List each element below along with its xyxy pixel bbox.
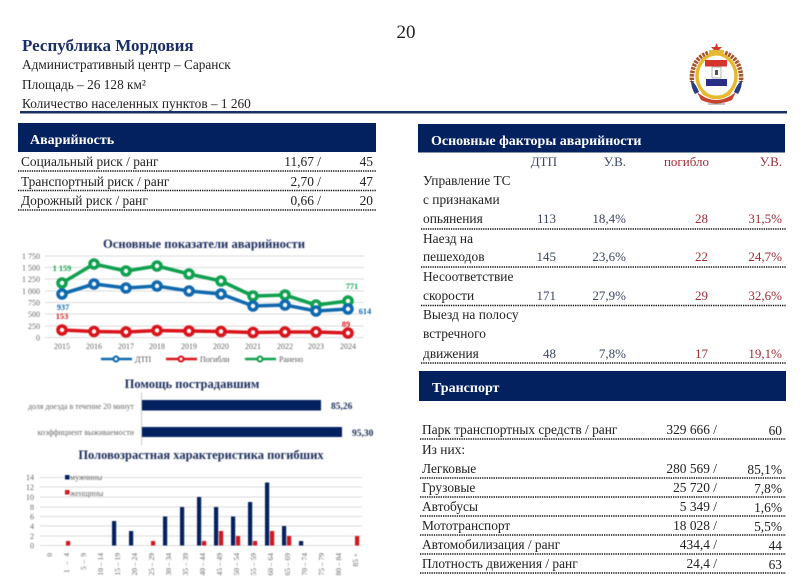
line chart: main accident indicators — [22, 237, 371, 364]
page number: 20 — [396, 22, 416, 43]
age axis labels: 70 – 74 — [300, 553, 309, 576]
region header: Площадь – 26 128 км² — [22, 77, 146, 92]
panel: main accident factors: 24,7% — [748, 249, 782, 264]
panel: main accident factors: 18,4% — [592, 211, 626, 226]
line chart: main accident indicators: 2015 — [54, 342, 70, 351]
panel: transport: 329 666 / — [666, 422, 717, 437]
heading: transport — [419, 371, 786, 401]
panel: transport: Легковые — [422, 461, 476, 476]
line chart: main accident indicators: 1 250 — [22, 275, 40, 284]
panel: transport: 7,8% — [754, 481, 782, 496]
bar chart: aid to victims — [28, 377, 374, 445]
series: deaths — [58, 326, 352, 337]
age axis labels — [45, 553, 360, 576]
line chart: main accident indicators: 153 — [56, 312, 68, 321]
panel: accident rate — [18, 123, 376, 210]
region header: Административный центр – Саранск — [22, 57, 231, 72]
line chart: main accident indicators: 2024 — [340, 342, 356, 351]
panel: transport: Из них: — [422, 442, 465, 457]
age axis labels: 75 – 79 — [317, 553, 326, 576]
panel: main accident factors: У.В. — [760, 154, 782, 169]
panel: accident rate: Социальный риск / ранг — [21, 154, 159, 169]
panel: transport: Автомобилизация / ранг — [422, 537, 561, 552]
panel: transport — [419, 371, 786, 573]
line chart: main accident indicators: 2019 — [181, 342, 197, 351]
panel: main accident factors: погибло — [664, 154, 709, 169]
panel: main accident factors: 17 — [695, 346, 708, 361]
panel: transport: 5 349 / — [680, 499, 717, 514]
bar chart: deaths by sex and age: 0 — [30, 542, 34, 550]
age axis labels: 40 – 44 — [198, 553, 207, 576]
bar chart: deaths by sex and age: 6 — [30, 512, 34, 522]
panel: accident rate: 20 — [360, 193, 373, 208]
panel: main accident factors: 27,9% — [592, 288, 626, 303]
icon: coat of arms — [691, 43, 742, 104]
panel: main accident factors: скорости — [423, 288, 474, 303]
age axis labels: 85 + — [351, 553, 360, 567]
panel: main accident factors: 48 — [543, 346, 556, 361]
bar chart: deaths by sex and age: 2 — [30, 532, 34, 541]
line chart: main accident indicators: 2023 — [308, 342, 324, 351]
panel: main accident factors: 145 — [536, 249, 556, 264]
line chart: main accident indicators: 1 159 — [53, 264, 71, 273]
panel: main accident factors: 29 — [695, 288, 708, 303]
panel: main accident factors: Управление ТС — [423, 173, 511, 188]
chart legend: Ранено — [279, 355, 303, 364]
panel: main accident factors: 171 — [536, 288, 556, 303]
panel: accident rate: 0,66 / — [290, 193, 321, 208]
panel: transport: 44 — [769, 538, 782, 553]
line chart: main accident indicators: 1 750 — [22, 252, 40, 261]
panel: main accident factors: 31,5% — [748, 211, 782, 226]
chart legend — [101, 355, 303, 364]
heading: accident rate — [18, 123, 376, 152]
series: road accidents — [58, 280, 352, 315]
line chart: main accident indicators: 250 — [28, 322, 40, 331]
panel: main accident factors: 32,6% — [748, 288, 782, 303]
age axis labels: 55 – 59 — [249, 553, 258, 576]
line chart: main accident indicators: 614 — [359, 307, 371, 316]
heading: transport: Транспорт — [432, 381, 500, 396]
chart legend: женщины — [69, 489, 104, 498]
panel: transport: 18 028 / — [673, 518, 717, 533]
age axis labels: 20 – 24 — [130, 553, 139, 576]
panel: main accident factors: 113 — [537, 211, 556, 226]
panel: main accident factors: с признаками — [423, 192, 500, 207]
line chart: main accident indicators: 0 — [36, 334, 40, 342]
bar chart: aid to victims: коэффициент выживаемости — [38, 428, 135, 437]
bar chart: deaths by sex and age: Половозрастная характеристика погибших — [78, 448, 324, 462]
heading: main factors: Основные факторы аварийности — [431, 134, 641, 149]
chart legend: мужчины — [70, 473, 103, 482]
line chart: main accident indicators: 771 — [346, 282, 358, 291]
region header — [22, 36, 251, 111]
line chart: main accident indicators: 750 — [28, 298, 40, 308]
bar chart: deaths by sex and age: 10 — [26, 493, 34, 502]
panel: accident rate: 2,70 / — [290, 174, 321, 189]
age axis labels: 45 – 49 — [215, 553, 224, 576]
bar chart: deaths by sex and age: 14 — [26, 473, 34, 482]
panel: main accident factors: 22 — [695, 249, 708, 264]
panel: main accident factors: ДТП — [531, 154, 557, 169]
bar chart: deaths by sex and age: 4 — [30, 522, 34, 531]
chart legend — [65, 473, 104, 498]
age axis labels: 35 – 39 — [181, 553, 190, 576]
female bars — [66, 531, 359, 546]
bar chart: aid to victims: 95,30 — [352, 429, 374, 439]
panel: accident rate: 11,67 / — [284, 154, 321, 169]
panel: transport: 24,4 / — [686, 556, 717, 571]
bar chart: aid to victims: 85,26 — [331, 402, 353, 412]
panel: main accident factors: Выезд на полосу — [423, 307, 519, 322]
panel: main accident factors: 23,6% — [592, 249, 626, 264]
panel: transport: 60 — [769, 423, 782, 438]
panel: transport: Грузовые — [422, 480, 475, 495]
line chart: main accident indicators: 937 — [57, 303, 69, 312]
panel: transport: 85,1% — [747, 462, 782, 477]
panel: accident rate: Дорожный риск / ранг — [21, 193, 148, 208]
panel: transport: 5,5% — [754, 519, 782, 534]
line chart: main accident indicators: 2021 — [245, 342, 261, 351]
line chart: main accident indicators: 1 000 — [22, 287, 40, 296]
panel: main accident factors: 19,1% — [748, 346, 782, 361]
line chart: main accident indicators: 500 — [28, 310, 40, 319]
panel: main accident factors: 7,8% — [599, 346, 626, 361]
age axis labels: 5 – 9 — [79, 553, 88, 570]
panel: main accident factors: движения — [423, 346, 479, 361]
panel: main accident factors: встречного — [423, 326, 486, 341]
line chart: main accident indicators: 1 500 — [22, 264, 40, 272]
heading: main factors — [418, 124, 785, 152]
panel: accident rate: 47 — [360, 174, 373, 189]
line chart: main accident indicators: 2020 — [213, 342, 229, 351]
panel: transport: 434,4 / — [680, 537, 717, 552]
bar chart: aid to victims: доля доезда в течение 20 минут — [28, 402, 135, 411]
age axis labels: 60 – 64 — [266, 553, 275, 576]
age axis labels: 50 – 54 — [232, 553, 241, 576]
chart legend: ДТП — [135, 355, 151, 364]
age axis labels: 15 – 19 — [113, 553, 122, 576]
age axis labels: 65 – 69 — [283, 553, 292, 576]
panel: transport: Мототранспорт — [422, 518, 510, 533]
chart legend: Погибли — [200, 355, 230, 364]
panel: main accident factors: пешеходов — [423, 249, 485, 264]
panel: transport: Парк транспортных средств / ранг — [422, 422, 618, 437]
heading: accident rate: Аварийность — [30, 133, 115, 148]
age axis labels: 25 – 29 — [147, 553, 156, 576]
panel: main accident factors: Наезд на — [423, 231, 473, 246]
panel: main accident factors: У.В. — [604, 154, 626, 169]
panel: transport: Автобусы — [422, 499, 478, 514]
age axis labels: 1 – 4 — [62, 553, 71, 573]
line chart: main accident indicators: 2018 — [149, 342, 165, 351]
panel: accident rate: Транспортный риск / ранг — [21, 174, 170, 189]
panel: main accident factors: Несоответствие — [423, 269, 513, 284]
panel: transport: Плотность движения / ранг — [422, 556, 578, 571]
panel: transport: 25 720 / — [673, 480, 717, 495]
header rule — [20, 111, 787, 114]
panel: transport: 63 — [769, 557, 782, 572]
male bars — [112, 482, 303, 546]
panel: main accident factors — [418, 124, 786, 363]
bar chart: deaths by sex and age: 8 — [30, 503, 34, 512]
bar chart: aid to victims: Помощь пострадавшим — [125, 377, 260, 391]
bar chart: deaths by sex and age — [26, 448, 362, 576]
panel: transport: 1,6% — [754, 500, 782, 515]
series: injured — [58, 260, 352, 309]
line chart: main accident indicators: 2022 — [277, 342, 293, 351]
bar chart: deaths by sex and age: 12 — [26, 483, 34, 492]
panel: accident rate: 45 — [360, 154, 373, 169]
panel: main accident factors: 28 — [695, 211, 708, 226]
age axis labels: 30 – 34 — [164, 553, 173, 576]
panel: transport: 280 569 / — [666, 461, 717, 476]
line chart: main accident indicators: 89 — [342, 320, 350, 329]
line chart: main accident indicators: 2016 — [86, 342, 102, 351]
panel: main accident factors: опьянения — [423, 211, 483, 226]
region header: Количество населенных пунктов – 1 260 — [22, 96, 251, 111]
line chart: main accident indicators: 2017 — [118, 342, 134, 351]
age axis labels: 80 – 84 — [334, 553, 343, 576]
region header: Республика Мордовия — [22, 36, 194, 55]
line chart: main accident indicators: Основные показатели аварийности — [103, 237, 305, 251]
age axis labels: 10 – 14 — [96, 553, 105, 576]
age axis labels: 0 — [45, 553, 54, 557]
